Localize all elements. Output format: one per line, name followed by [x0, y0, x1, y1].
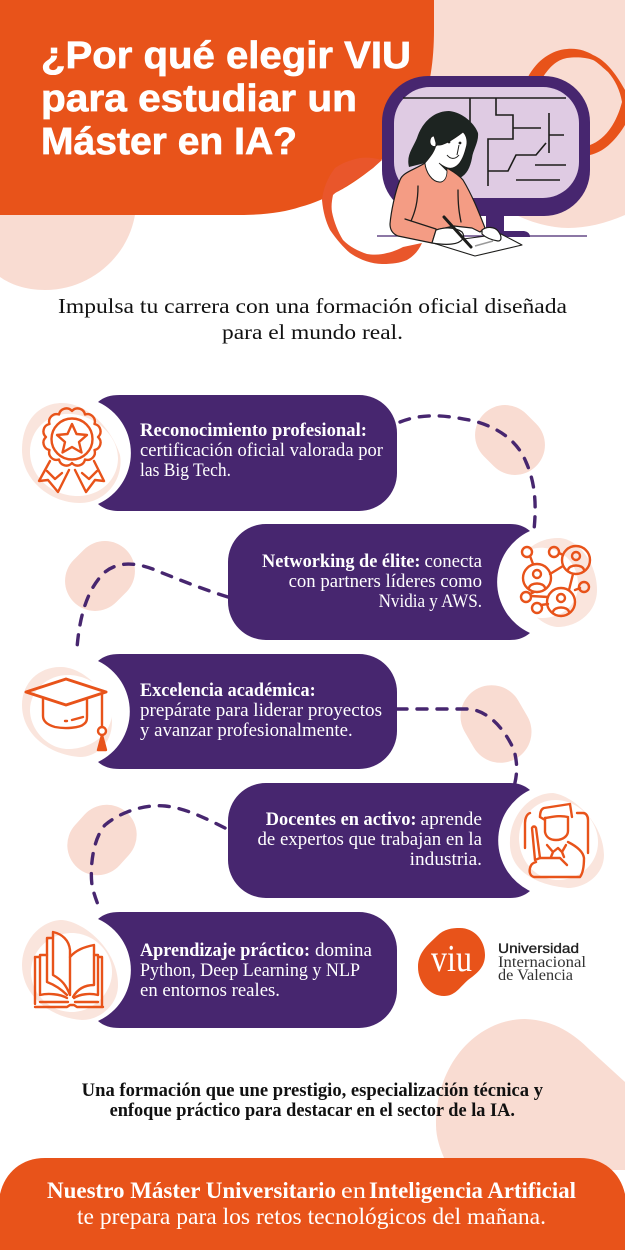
icon: graduation cap	[22, 667, 112, 757]
card 3: excelencia académica: Excelencia académica:	[140, 681, 316, 701]
footer panel: Nuestro Máster Universitario	[47, 1178, 336, 1203]
card 5: aprendizaje práctico: Aprendizaje práctico:	[140, 941, 310, 961]
card 5: aprendizaje práctico	[98, 912, 397, 1028]
card 2: networking de élite: con partners líderes como	[289, 572, 482, 592]
dashed connector 4	[91, 806, 225, 910]
decorative blob: under header	[0, 205, 136, 290]
card 2: networking de élite: conecta	[424, 552, 482, 572]
card 3: excelencia académica: y avanzar profesionalmente.	[140, 721, 353, 741]
dashed connector blobs	[53, 393, 557, 888]
closing text	[82, 1081, 544, 1121]
icon: open book	[22, 920, 118, 1020]
logo: VIU	[418, 928, 587, 996]
icon: network	[507, 538, 597, 627]
card 1: reconocimiento profesional: Reconocimiento profesional:	[140, 421, 367, 441]
card 5: aprendizaje práctico: domina	[315, 941, 372, 961]
card 4: docentes en activo: aprende	[420, 810, 482, 830]
card 4: docentes en activo: Docentes en activo:	[266, 810, 416, 830]
card 5: aprendizaje práctico: en entornos reales.	[140, 981, 280, 1001]
footer panel	[0, 1158, 625, 1250]
title	[41, 35, 411, 163]
card 1: reconocimiento profesional: las Big Tech.	[140, 461, 231, 481]
closing text: Una formación que une prestigio, especialización técnica y	[82, 1081, 544, 1101]
decorative blob: bottom right	[436, 1019, 625, 1170]
woman	[390, 111, 522, 256]
logo: VIU: viu	[431, 938, 472, 980]
card 2: networking de élite: Networking de élite:	[262, 552, 420, 572]
logo: VIU: Universidad	[498, 940, 579, 956]
header panel	[0, 0, 434, 215]
card 2: networking de élite	[228, 524, 530, 640]
card 2: networking de élite: Nvidia y AWS.	[379, 592, 482, 612]
dashed connector 3	[397, 709, 517, 787]
logo: VIU: de Valencia	[498, 967, 573, 984]
icon: rosette award	[22, 403, 121, 503]
card 4: docentes en activo: de expertos que trabajan en la	[258, 830, 482, 850]
card 4: docentes en activo: industria.	[410, 850, 482, 870]
illustration: woman at monitor	[377, 76, 590, 256]
intro text: para el mundo real.	[222, 320, 403, 344]
footer panel: te prepara para los retos tecnológicos del mañana.	[77, 1204, 546, 1229]
title: ¿Por qué elegir VIU	[41, 35, 411, 77]
intro text: Impulsa tu carrera con una formación oficial diseñada	[58, 294, 567, 318]
card 4: docentes en activo	[228, 783, 530, 898]
card 5: aprendizaje práctico: Python, Deep Learning y NLP	[140, 961, 360, 981]
decorative ring: top right	[528, 49, 625, 155]
decorative ring: lower left of illustration	[322, 158, 422, 264]
dashed connector 2	[77, 564, 228, 648]
monitor	[377, 76, 590, 237]
title: para estudiar un	[41, 78, 357, 120]
card 1: reconocimiento profesional	[98, 395, 397, 511]
footer panel: en	[341, 1178, 367, 1203]
closing text: enfoque práctico para destacar en el sector de la IA.	[110, 1101, 515, 1121]
card 3: excelencia académica: prepárate para liderar proyectos	[140, 701, 382, 721]
intro text	[58, 294, 567, 344]
card 3: excelencia académica	[98, 654, 397, 769]
decorative blob: top right	[420, 0, 625, 228]
card 1: reconocimiento profesional: certificación oficial valorada por	[140, 441, 383, 461]
footer panel: Inteligencia Artificial	[369, 1178, 576, 1203]
logo: VIU: Internacional	[498, 954, 587, 971]
title: Máster en IA?	[41, 121, 297, 163]
dashed connector 1	[400, 416, 535, 530]
icon: teacher	[510, 793, 604, 888]
